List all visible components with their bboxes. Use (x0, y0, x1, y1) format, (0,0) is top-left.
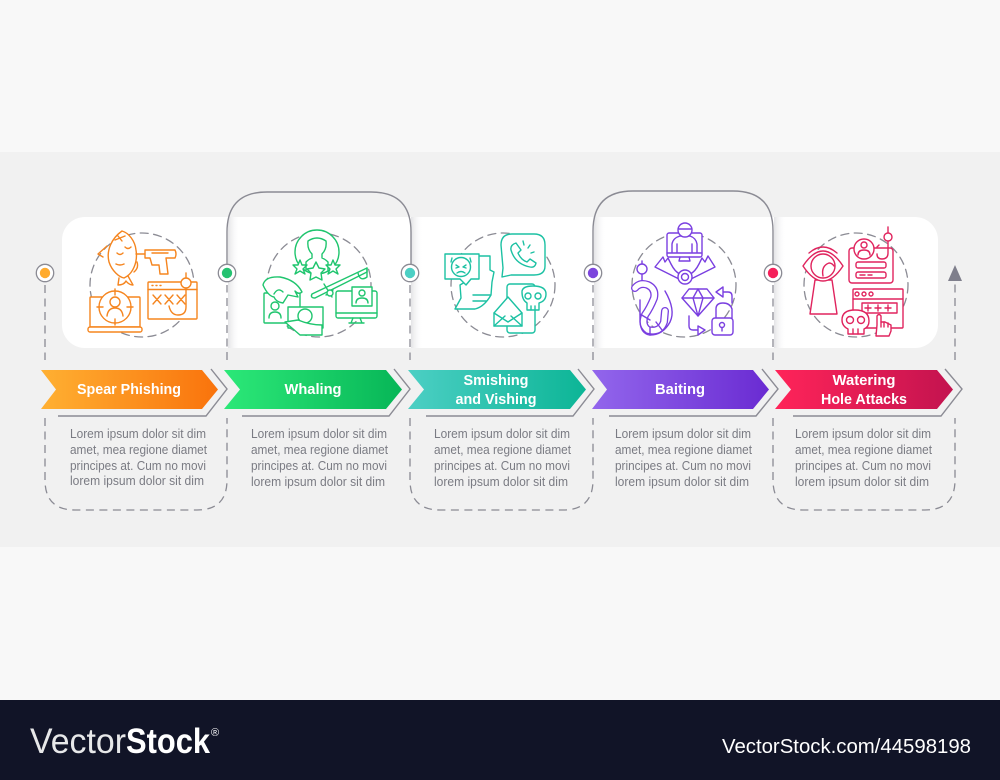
fishing rod (311, 268, 367, 298)
padlock (712, 303, 733, 335)
body text 5: principes at. Cum no movi (795, 459, 931, 473)
body text 3: lorem ipsum dolor sit dim (434, 475, 568, 489)
node: smishing (401, 264, 419, 282)
body text 4: principes at. Cum no movi (615, 459, 751, 473)
body text 5: Lorem ipsum dolor sit dim (795, 427, 931, 441)
footer logo: Vector (30, 722, 126, 761)
arrowhead: end of timeline (948, 265, 962, 281)
login card with hook (849, 227, 893, 283)
body text 2: principes at. Cum no movi (251, 459, 387, 473)
phone with envelope and skull (494, 284, 546, 333)
footer image id: VectorStock.com/44598198 (722, 736, 971, 758)
banknote and hand (285, 307, 323, 335)
step 3: smishing and vishing: and Vishing (456, 391, 536, 408)
body text 4: amet, mea regione diamet (615, 443, 752, 457)
body text 3 (434, 427, 571, 489)
body text 2: amet, mea regione diamet (251, 443, 388, 457)
footer bar (0, 700, 1000, 780)
browser with password (853, 289, 903, 328)
arrows (689, 287, 732, 335)
step 1: spear phishing: Spear Phishing (77, 381, 181, 398)
background band (0, 152, 1000, 547)
icon: smishing and vishing (445, 233, 555, 337)
avatar with stars (293, 230, 340, 280)
body text 4 (615, 427, 752, 489)
body text 1: lorem ipsum dolor sit dim (70, 474, 204, 488)
body text 5: amet, mea regione diamet (795, 443, 932, 457)
hacker on monitor (667, 223, 702, 261)
bear trap (655, 256, 715, 284)
node: whaling (218, 264, 236, 282)
harpoon gun (136, 250, 176, 274)
icon: spear phishing (88, 231, 197, 337)
body text 5 (795, 427, 932, 489)
browser with hook (148, 273, 197, 319)
body text 3: principes at. Cum no movi (434, 459, 570, 473)
body text 3: Lorem ipsum dolor sit dim (434, 427, 570, 441)
hook and worm (635, 261, 672, 335)
card and hand (263, 277, 302, 323)
footer logo: Stock (126, 722, 210, 761)
diamond (682, 289, 714, 316)
body text 3: amet, mea regione diamet (434, 443, 571, 457)
skull (842, 310, 869, 334)
node: spear phishing (36, 264, 54, 282)
laptop with target (88, 289, 142, 332)
body text 2 (251, 427, 388, 489)
footer logo (30, 722, 219, 761)
body text 2: lorem ipsum dolor sit dim (251, 475, 385, 489)
phone in hand with demon message (445, 254, 494, 309)
step 2: whaling: Whaling (284, 381, 342, 398)
step 1: spear phishing (41, 369, 227, 416)
body text 1: Lorem ipsum dolor sit dim (70, 427, 206, 441)
body text 1: principes at. Cum no movi (70, 459, 206, 473)
call bubble (501, 234, 545, 277)
body text 4: lorem ipsum dolor sit dim (615, 475, 749, 489)
body text 1 (70, 427, 207, 488)
monitor (336, 287, 377, 323)
eye in keyhole (803, 247, 843, 314)
footer logo: ® (211, 727, 219, 739)
body text 2: Lorem ipsum dolor sit dim (251, 427, 387, 441)
fish (98, 231, 138, 285)
node: watering hole (764, 264, 782, 282)
icon: watering hole attacks (803, 227, 908, 337)
step 5: watering hole attacks (775, 369, 962, 416)
step 4: baiting (592, 369, 778, 416)
connector lines (45, 191, 955, 510)
step 5: watering hole attacks: Hole Attacks (821, 391, 907, 408)
body text 1: amet, mea regione diamet (70, 443, 207, 457)
body text 4: Lorem ipsum dolor sit dim (615, 427, 751, 441)
step 4: baiting: Baiting (655, 381, 705, 398)
step 5: watering hole attacks: Watering (832, 372, 896, 389)
step 3: smishing and vishing: Smishing (464, 372, 528, 389)
step 2: whaling (224, 369, 410, 416)
body text 5: lorem ipsum dolor sit dim (795, 475, 929, 489)
pointing hand (876, 314, 891, 336)
node: baiting (584, 264, 602, 282)
icon: baiting (632, 223, 736, 337)
white icon panel (62, 217, 938, 348)
icon: whaling (263, 230, 377, 337)
step 3: smishing and vishing (408, 369, 594, 416)
